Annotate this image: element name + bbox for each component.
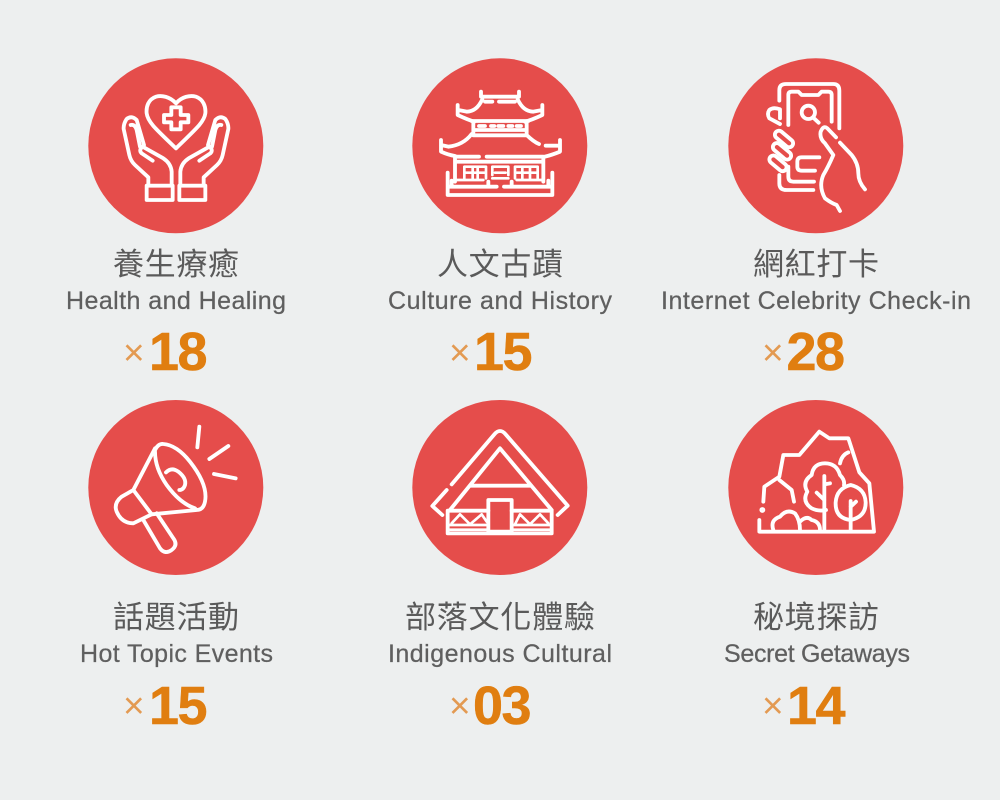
count: 03 xyxy=(473,676,531,736)
count: 14 xyxy=(787,676,846,736)
heading: 養生療癒 xyxy=(113,247,239,282)
panel: health and healing xyxy=(66,58,286,382)
heading: 人文古蹟 xyxy=(437,247,563,282)
subheading: Culture and History xyxy=(388,287,612,315)
subheading: Indigenous Cultural xyxy=(388,640,612,668)
heading: 部落文化體驗 xyxy=(405,600,595,635)
subheading: Secret Getaways xyxy=(724,640,910,668)
multiplier: × xyxy=(449,332,471,373)
icon circle: pagoda temple xyxy=(412,58,587,233)
multiplier: × xyxy=(762,332,784,373)
subheading: Hot Topic Events xyxy=(80,640,273,668)
count: 15 xyxy=(474,322,532,382)
icon circle: tribal house xyxy=(412,400,587,575)
multiplier: × xyxy=(449,685,471,726)
count: 28 xyxy=(786,322,844,382)
heading: 話題活動 xyxy=(113,600,239,635)
icon circle: hand holding phone xyxy=(728,58,903,233)
multiplier: × xyxy=(123,685,145,726)
panel: hot topic events xyxy=(80,400,273,736)
panel: secret getaways xyxy=(724,400,910,736)
panel: indigenous cultural xyxy=(388,400,612,736)
multiplier: × xyxy=(762,685,784,726)
subheading: Health and Healing xyxy=(66,287,286,315)
multiplier: × xyxy=(123,332,145,373)
panel: culture and history xyxy=(388,58,612,382)
subheading: Internet Celebrity Check-in xyxy=(661,287,971,315)
count: 15 xyxy=(149,676,207,736)
icon circle: megaphone xyxy=(88,400,263,575)
panel: internet celebrity check-in xyxy=(661,58,971,382)
heading: 秘境探訪 xyxy=(753,600,879,635)
heading: 網紅打卡 xyxy=(753,247,879,282)
count: 18 xyxy=(149,322,207,382)
icon circle: caring hands and heart xyxy=(88,58,263,233)
icon circle: mountain and trees xyxy=(728,400,903,575)
